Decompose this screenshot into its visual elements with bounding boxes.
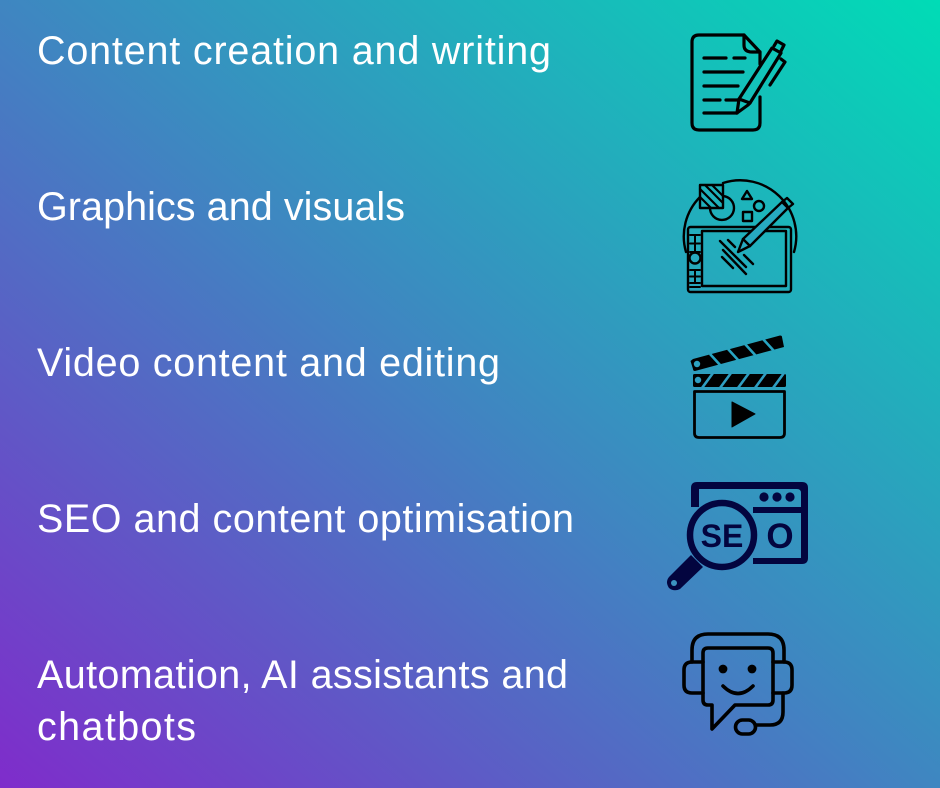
icon: document and pen — [692, 35, 785, 130]
text: automation, ai assistants and chatbots: Automation, AI assistants and — [37, 653, 568, 697]
text: seo and content optimisation: SEO and content optimisation — [37, 497, 574, 541]
text: automation, ai assistants and chatbots: chatbots — [37, 705, 196, 749]
text: automation, ai assistants and chatbots — [37, 653, 568, 749]
text: video content and editing: Video content and editing — [37, 341, 500, 385]
icon: drawing tablet and palette — [684, 180, 796, 292]
icon: seo magnifier and browser window: O — [766, 517, 794, 556]
icon: seo magnifier and browser window — [667, 482, 808, 590]
text: graphics and visuals: Graphics and visuals — [37, 185, 405, 229]
icon: clapperboard — [690, 336, 786, 438]
text: content creation and writing: Content creation and writing — [37, 29, 551, 73]
icon: seo magnifier and browser window: SE — [701, 518, 743, 554]
icon: chatbot with headset — [684, 634, 792, 734]
